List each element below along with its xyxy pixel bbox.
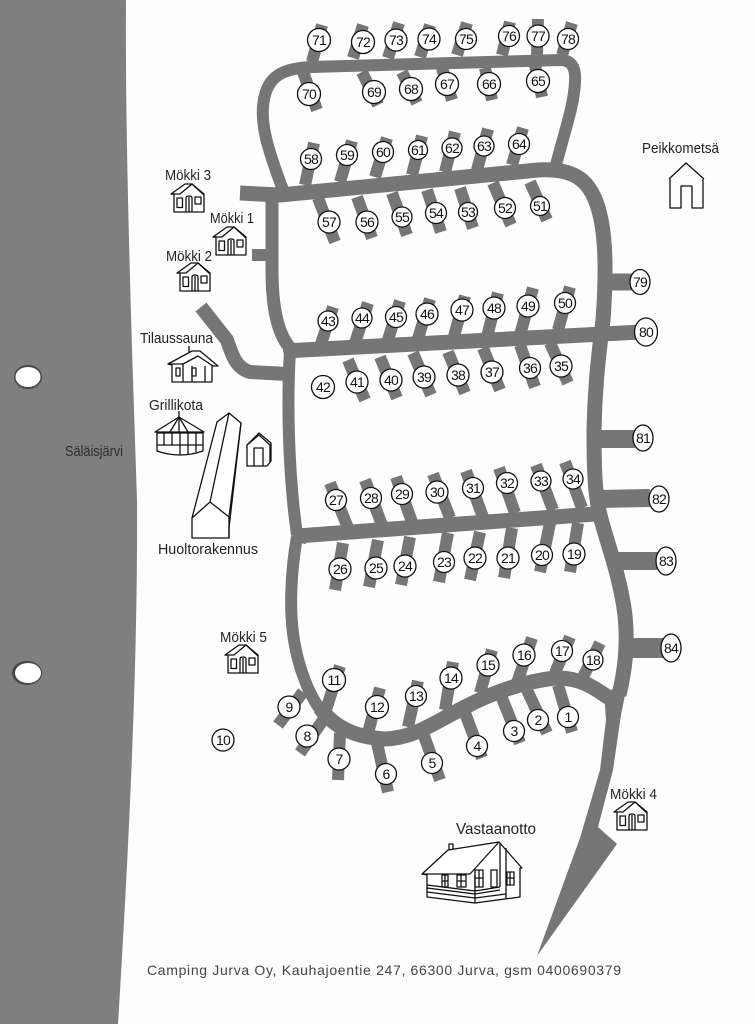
punch hole: lower (12, 661, 42, 685)
lake: Säläisjärvi (0, 0, 137, 1024)
site 14: 14 (444, 670, 459, 686)
site 73: 73 (389, 32, 404, 48)
label: Mökki 4: Mökki 4 (610, 786, 657, 803)
site 45 (386, 301, 406, 343)
site 30 (426, 474, 450, 518)
site 19: 19 (567, 546, 582, 562)
site 34 (563, 462, 583, 508)
label: Vastaanotto: Vastaanotto (456, 821, 536, 838)
site 17 (552, 637, 572, 673)
site 29: 29 (395, 486, 410, 502)
site 24 (394, 537, 416, 585)
site 60 (372, 138, 394, 177)
site 58 (300, 143, 322, 185)
site 81 (633, 425, 653, 451)
site 36 (520, 345, 540, 387)
site 24: 24 (398, 558, 413, 574)
site 16 (513, 638, 535, 683)
site 70: 70 (302, 86, 317, 102)
site 27: 27 (329, 492, 344, 508)
site 61: 61 (411, 142, 426, 158)
site 74 (418, 25, 440, 57)
site 73 (385, 23, 407, 58)
site 71 (308, 25, 330, 62)
site 65 (526, 65, 550, 97)
site 69 (362, 72, 386, 105)
site 44 (352, 303, 372, 343)
site 50 (554, 287, 576, 330)
icon: cottage Mökki 2 (177, 263, 210, 291)
site 48 (483, 293, 505, 337)
site 77 (527, 19, 549, 55)
site 33 (531, 465, 553, 510)
site 6 (376, 743, 396, 792)
site 45: 45 (389, 309, 404, 325)
site 39: 39 (417, 369, 432, 385)
site 63: 63 (477, 138, 492, 154)
site 25: 25 (369, 560, 384, 576)
icon: cottage Mökki 4 (614, 802, 647, 830)
site 39 (413, 353, 435, 395)
site 19 (563, 523, 585, 572)
site 63 (474, 129, 494, 170)
road network (201, 60, 663, 956)
site 67 (436, 68, 458, 100)
site 26 (329, 543, 351, 590)
site 27 (326, 483, 348, 528)
site 42 (312, 376, 334, 398)
site 79: 79 (633, 274, 648, 290)
site 11 (322, 666, 346, 713)
site 17: 17 (555, 643, 570, 659)
site 6: 6 (382, 766, 390, 782)
site 21: 21 (501, 550, 516, 566)
site 80 (634, 318, 658, 346)
site 68 (400, 72, 422, 103)
site 13: 13 (409, 688, 424, 704)
site 20: 20 (535, 547, 550, 563)
site 7: 7 (336, 751, 344, 767)
site 53: 53 (461, 204, 476, 220)
footer: contact line: Camping Jurva Oy, Kauhajoentie 247, 66300 Jurva, gsm 0400690379 (147, 962, 621, 978)
site 49 (517, 288, 539, 335)
site 56: 56 (360, 214, 375, 230)
site 35 (550, 343, 572, 383)
icon: grill hut (155, 411, 204, 455)
site 18 (583, 643, 603, 677)
icon: sauna building (168, 346, 218, 382)
site 3 (502, 698, 524, 743)
site 65: 65 (531, 73, 546, 89)
site 75: 75 (459, 31, 474, 47)
site 4: 4 (474, 738, 482, 754)
site 75 (456, 23, 476, 55)
site 26: 26 (333, 561, 348, 577)
site 14 (440, 662, 462, 710)
icon: small shed (247, 433, 271, 466)
site 78: 78 (561, 31, 576, 47)
site 2: 2 (534, 712, 542, 728)
site 51 (530, 182, 550, 220)
site 3: 3 (510, 723, 518, 739)
site 80: 80 (639, 324, 654, 340)
site 32 (496, 468, 518, 513)
site 20 (532, 523, 552, 572)
site 70 (298, 72, 320, 110)
site 54 (426, 190, 446, 232)
site 46: 46 (420, 306, 435, 322)
site 7 (328, 733, 350, 780)
icon: cottage Mökki 1 (213, 227, 246, 255)
icon: service building Huoltorakennus (192, 413, 241, 538)
site 41 (346, 360, 368, 400)
site 15 (477, 650, 499, 693)
site 47 (451, 296, 473, 340)
site 50: 50 (558, 295, 573, 311)
label: Tilaussauna: Tilaussauna (140, 330, 214, 347)
icon: reception building (422, 842, 522, 903)
site 66: 66 (482, 76, 497, 92)
site 62 (442, 132, 462, 172)
site 58: 58 (304, 151, 319, 167)
site 10 (212, 729, 234, 751)
site 29 (392, 477, 412, 522)
label: Peikkometsä: Peikkometsä (642, 140, 720, 157)
site 28: 28 (364, 490, 379, 506)
site 18: 18 (586, 652, 601, 668)
site 12 (366, 688, 388, 733)
site 59: 59 (340, 147, 355, 163)
site 21 (497, 528, 519, 578)
site 52 (493, 183, 516, 225)
site 69: 69 (367, 84, 382, 100)
site 44: 44 (355, 310, 370, 326)
site 31 (462, 471, 484, 517)
site 57 (318, 198, 340, 242)
site 30: 30 (430, 484, 445, 500)
site 11: 11 (328, 672, 341, 688)
site 38: 38 (451, 367, 466, 383)
site 71: 71 (312, 32, 327, 48)
site 22: 22 (468, 550, 483, 566)
site 12: 12 (370, 699, 385, 715)
label: Huoltorakennus: Huoltorakennus (158, 541, 258, 558)
site 77: 77 (531, 28, 546, 44)
site 40 (380, 357, 402, 398)
site 31: 31 (466, 480, 481, 496)
site 5: 5 (428, 755, 436, 771)
site 36: 36 (523, 360, 538, 376)
label: Säläisjärvi: Säläisjärvi (65, 443, 123, 460)
site 47: 47 (455, 302, 470, 318)
site 72: 72 (356, 34, 371, 50)
site 57: 57 (322, 214, 337, 230)
site 79 (630, 270, 650, 294)
label: Mökki 2: Mökki 2 (166, 248, 212, 265)
site 23 (434, 533, 454, 582)
site 25 (365, 540, 387, 587)
site 55 (392, 193, 412, 235)
label: Mökki 3: Mökki 3 (165, 167, 211, 184)
site 1 (558, 685, 578, 732)
site 54: 54 (429, 205, 444, 221)
site 8 (296, 713, 328, 753)
site 35: 35 (554, 358, 569, 374)
site 83: 83 (659, 553, 674, 569)
site 48: 48 (487, 300, 502, 316)
site 37: 37 (485, 364, 500, 380)
site 60: 60 (376, 144, 391, 160)
site 68: 68 (404, 81, 419, 97)
site 41: 41 (350, 374, 365, 390)
site 52: 52 (498, 200, 513, 216)
site 74: 74 (422, 31, 437, 47)
site 53 (458, 188, 478, 228)
site 81: 81 (636, 430, 651, 446)
site 78 (558, 23, 578, 55)
site 16: 16 (517, 647, 532, 663)
site 62: 62 (445, 140, 460, 156)
site 43 (318, 307, 338, 347)
site 72 (352, 25, 374, 58)
site 56 (356, 197, 378, 238)
label: Mökki 5: Mökki 5 (220, 629, 267, 646)
site 82: 82 (652, 491, 667, 507)
site 43: 43 (321, 313, 336, 329)
site 34: 34 (566, 471, 581, 487)
site 55: 55 (395, 209, 410, 225)
site 5 (422, 733, 442, 780)
site 10: 10 (216, 732, 231, 748)
site 66 (478, 68, 500, 100)
site 64 (508, 128, 530, 165)
site 83 (656, 547, 676, 575)
site 28 (360, 480, 382, 525)
site 76 (498, 22, 520, 55)
site 67: 67 (440, 76, 455, 92)
site 33: 33 (534, 473, 549, 489)
icon: cottage Mökki 5 (225, 645, 258, 673)
site 2 (527, 690, 548, 733)
site 46 (416, 299, 438, 342)
site 40: 40 (384, 372, 399, 388)
site 4 (465, 713, 488, 758)
site 15: 15 (481, 657, 496, 673)
label: Grillikota: Grillikota (149, 397, 204, 414)
site 13 (406, 681, 426, 727)
site 42: 42 (316, 379, 331, 395)
site 37 (481, 348, 503, 390)
icon: Peikkometsä house (669, 163, 704, 208)
site 59 (336, 141, 358, 182)
site 22 (464, 532, 486, 580)
punch hole: upper (14, 365, 42, 389)
site 84: 84 (664, 640, 679, 656)
site 32: 32 (500, 475, 515, 491)
site 1: 1 (564, 709, 572, 725)
site 9: 9 (286, 699, 294, 715)
label: Mökki 1: Mökki 1 (210, 210, 254, 227)
site 76: 76 (502, 28, 517, 44)
site 23: 23 (437, 554, 452, 570)
site 82 (649, 486, 669, 512)
site 64: 64 (512, 136, 527, 152)
site 49: 49 (521, 298, 536, 314)
site 8: 8 (304, 728, 312, 744)
site 38 (447, 352, 469, 393)
site 61 (408, 136, 428, 175)
site 51: 51 (533, 198, 548, 214)
site 84 (661, 634, 681, 662)
icon: cottage Mökki 3 (171, 184, 204, 212)
site 9 (278, 692, 303, 725)
